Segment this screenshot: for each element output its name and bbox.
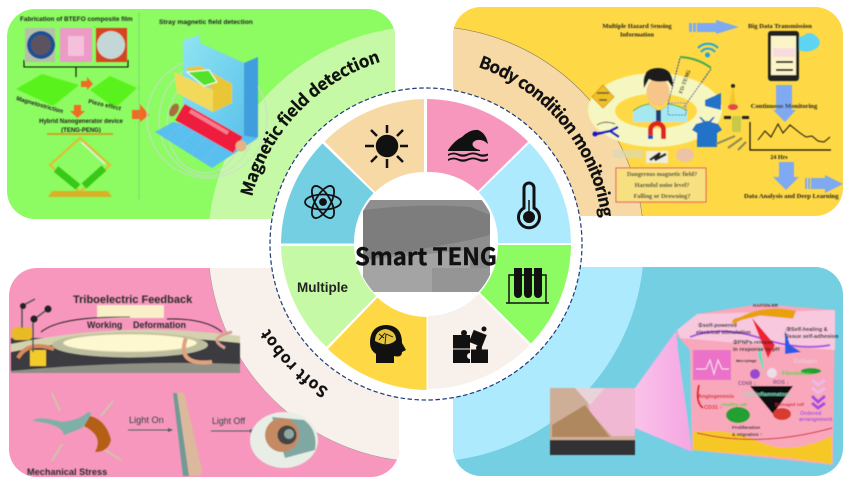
healing labels: Tissue self-adhesion xyxy=(784,334,839,340)
hazard icons around ring xyxy=(592,85,722,147)
healing labels: Anti-inflammatory xyxy=(743,392,791,398)
big data label: Big Data Transmission xyxy=(748,23,812,30)
wedge: brain xyxy=(328,298,426,390)
healing labels: HAP/SN-NR xyxy=(753,303,779,308)
panel: wound healing xyxy=(453,267,843,476)
healing labels: arrangement xyxy=(799,417,832,423)
icon: atom xyxy=(305,183,341,221)
film labels: Hybrid Nanogenerator device xyxy=(39,119,124,125)
orange arrows xyxy=(70,77,149,122)
FD-TENG sensor arc xyxy=(668,57,711,115)
composite film photos xyxy=(25,28,127,62)
healing labels: & migration ↑ xyxy=(732,432,762,438)
person xyxy=(633,68,687,122)
hazard question box xyxy=(616,168,706,202)
feedback labels: Triboelectric Feedback xyxy=(73,294,193,306)
band title: body condition monitoring: Body condition monitoring xyxy=(479,56,611,218)
hazard question box: Falling or Drowning? xyxy=(634,193,690,200)
chevrons xyxy=(812,380,825,393)
wedge: sun xyxy=(324,99,424,192)
heading: BTEFO fabrication: Fabrication of BTEFO composite film xyxy=(20,16,133,23)
hazard question box: Dangerous magnetic field? xyxy=(627,171,697,178)
piezo and magnetostriction films xyxy=(16,74,137,108)
light on step: Light On xyxy=(129,415,164,425)
mechanical stress actuator xyxy=(33,393,121,461)
wedge: temperature xyxy=(479,143,571,243)
healing labels: Damaged cell xyxy=(775,402,804,407)
film labels xyxy=(15,96,124,134)
healing labels: electrical stimulation xyxy=(696,330,751,336)
healing labels: Collagen xyxy=(794,359,818,365)
film labels: (TENG-PENG) xyxy=(61,128,101,134)
arrow: onward xyxy=(805,175,843,193)
sensor device xyxy=(716,84,749,150)
panel: magnetic field detection xyxy=(7,9,395,219)
wedge: chemistry xyxy=(480,245,571,344)
continuous monitoring label: Continuous Monitoring xyxy=(751,103,818,110)
center image xyxy=(355,173,498,315)
line chart xyxy=(750,122,831,150)
healing labels xyxy=(696,303,839,438)
sensor ring xyxy=(588,73,722,147)
light off step xyxy=(211,412,318,468)
animal photo xyxy=(550,388,635,455)
arrow: to analysis xyxy=(773,162,799,190)
panel: soft robot xyxy=(9,268,399,477)
feedback labels: Working xyxy=(87,320,122,330)
light off step: Light Off xyxy=(212,416,246,426)
feedback labels xyxy=(73,294,193,330)
healing labels: ①self-powered xyxy=(698,322,737,329)
icon: thermometer xyxy=(518,183,540,228)
phone and cloud xyxy=(768,31,820,81)
hybrid nanogenerator device xyxy=(47,133,113,197)
film labels: Magnetostriction xyxy=(15,96,64,115)
band title: magnetic field detection: Magnetic field detection xyxy=(240,54,380,196)
arrow: to transmission xyxy=(689,20,739,34)
healing labels: CD31 ↑ xyxy=(704,405,723,411)
heading: stray magnetic field: Stray magnetic field detection xyxy=(159,19,253,26)
hazard sensing label: Information xyxy=(620,32,654,38)
light on step xyxy=(128,392,202,476)
healing labels: ③Self-healing & xyxy=(786,326,828,333)
icon: sun xyxy=(365,125,408,168)
healing labels: Angiogenesis xyxy=(698,394,734,400)
FD-TENG label: FD-TENG xyxy=(678,69,693,95)
center title: Smart TENG xyxy=(355,238,497,272)
fat cells band xyxy=(693,431,832,464)
arrow: to monitoring xyxy=(773,85,796,122)
hazard sensing label: Multiple Hazard Sensing xyxy=(602,23,672,30)
wifi symbol xyxy=(698,44,718,56)
icon: puzzle xyxy=(453,326,488,363)
wedge: multiple xyxy=(281,246,376,347)
icon: wave xyxy=(448,130,488,162)
healing labels: Macrophage xyxy=(736,359,757,363)
magnification cone xyxy=(605,331,692,452)
panel: body condition monitoring xyxy=(453,7,843,216)
healing labels: ②PNPs-release xyxy=(733,339,773,346)
angiogenesis arrow xyxy=(698,385,703,408)
healing labels: Ordered xyxy=(800,411,821,417)
analysis label: Data Analysis and Deep Learning xyxy=(744,193,839,200)
triboelectric feedback stage xyxy=(11,305,240,373)
hazard question box: Harmful noise level? xyxy=(635,182,689,189)
time axis label: 24 Hrs xyxy=(770,155,788,161)
icon: brain head xyxy=(370,325,406,363)
healing labels: Proliferation xyxy=(732,425,760,431)
small sensor samples xyxy=(613,148,694,163)
cell clusters xyxy=(726,368,821,423)
band title: soft robot: Soft robot xyxy=(260,328,328,398)
healing labels: Fibroblasts xyxy=(782,371,812,377)
wedge: wave xyxy=(427,99,528,191)
feedback labels: Deformation xyxy=(133,320,186,330)
robot arms and blocks xyxy=(12,299,232,366)
healing labels: Healthy cell xyxy=(722,402,747,407)
mechanical stress label: Mechanical Stress xyxy=(27,467,107,477)
healing labels: ROS ↓ xyxy=(773,380,789,386)
wedge: puzzle xyxy=(428,294,530,389)
stray field harvester illustration xyxy=(147,35,267,178)
label: multiple: Multiple xyxy=(297,280,348,295)
wedge: atom xyxy=(281,144,374,244)
skin cross-section xyxy=(676,304,835,465)
central wheel xyxy=(270,88,582,400)
film labels: Piezo effect xyxy=(88,99,121,112)
healing labels: CD68 ↓ xyxy=(738,381,757,387)
healing labels: in response to pH xyxy=(733,347,779,353)
icon: test tubes xyxy=(506,268,549,303)
